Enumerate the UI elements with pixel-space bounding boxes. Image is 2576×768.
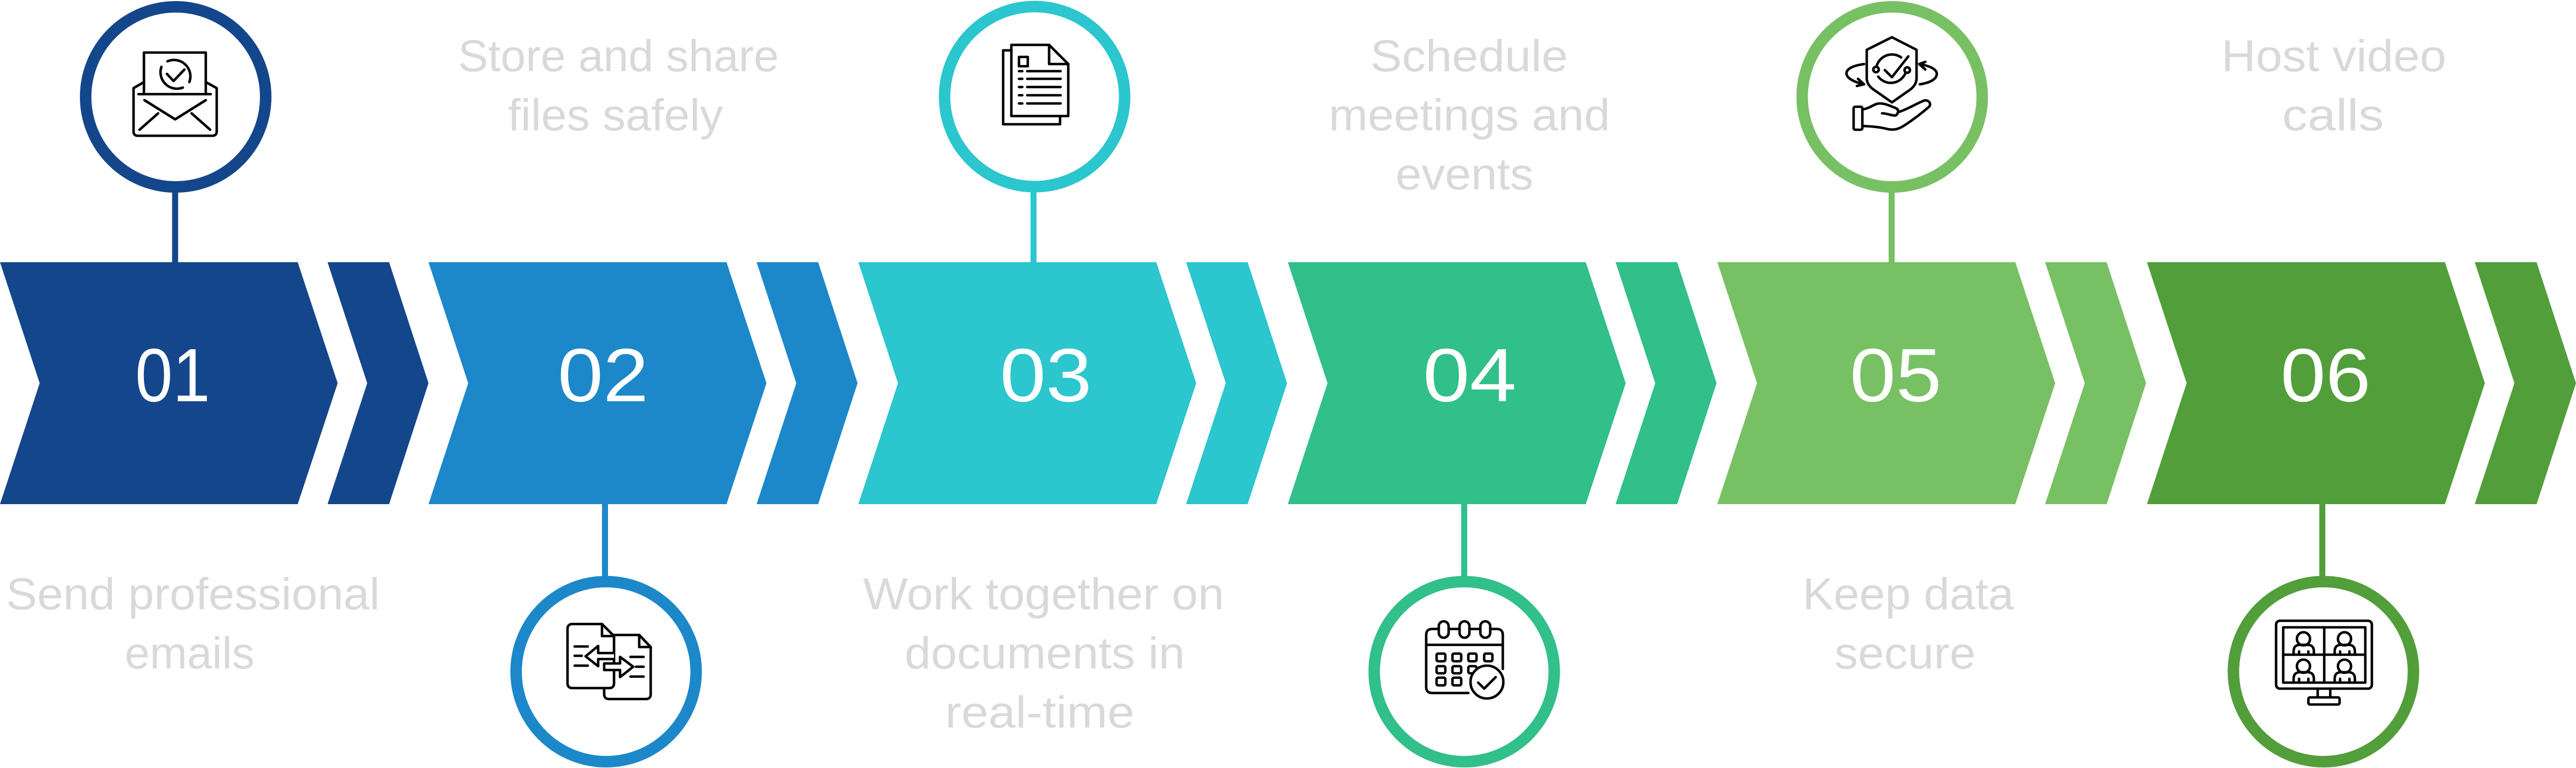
chevron 01 bbox=[0, 262, 429, 504]
connector 5 bbox=[1889, 186, 1895, 262]
number 01: 01 bbox=[135, 333, 210, 418]
ring 1 bbox=[85, 7, 266, 187]
label: send professional emails: emails bbox=[125, 628, 254, 678]
connector 1 bbox=[172, 186, 178, 262]
label: schedule meetings and events: Schedule bbox=[1370, 31, 1568, 81]
connector 3 bbox=[1031, 186, 1037, 262]
label: host video calls: calls bbox=[2282, 90, 2384, 140]
icon: video call monitor bbox=[2276, 621, 2372, 705]
label: work together on documents in real-time: documents in bbox=[905, 628, 1185, 678]
label: work together on documents in real-time: real-time bbox=[945, 688, 1134, 737]
step 4: schedule meetings and events bbox=[1288, 31, 1717, 762]
connector 2 bbox=[602, 504, 608, 581]
label: schedule meetings and events: meetings and bbox=[1329, 90, 1610, 140]
label: store and share files safely: Store and share bbox=[458, 31, 779, 81]
number 02: 02 bbox=[558, 333, 649, 418]
chevron 06 bbox=[2147, 262, 2576, 504]
label: keep data secure: Keep data bbox=[1803, 569, 2014, 619]
label: keep data secure: secure bbox=[1834, 628, 1976, 678]
label: host video calls: Host video bbox=[2221, 31, 2446, 81]
ring 5 bbox=[1802, 7, 1982, 187]
step 2: store and share files safely bbox=[429, 31, 858, 762]
label: store and share files safely bbox=[458, 31, 779, 140]
chevron 04 bbox=[1288, 262, 1717, 504]
label: schedule meetings and events: events bbox=[1396, 149, 1533, 199]
number 03: 03 bbox=[1000, 333, 1092, 418]
icon: shield on open hand bbox=[1846, 37, 1937, 130]
chevron 03 bbox=[858, 262, 1287, 504]
step 6: host video calls bbox=[2147, 31, 2576, 762]
label: keep data secure bbox=[1803, 569, 2014, 678]
label: store and share files safely: files safely bbox=[508, 90, 723, 140]
label: work together on documents in real-time bbox=[863, 569, 1224, 737]
ring 4 bbox=[1374, 581, 1554, 762]
ring 3 bbox=[945, 7, 1125, 187]
number 05: 05 bbox=[1850, 333, 1942, 418]
label: work together on documents in real-time: Work together on bbox=[863, 569, 1224, 619]
chevron 05 bbox=[1717, 262, 2146, 504]
chevron 02 bbox=[429, 262, 858, 504]
ring 2 bbox=[516, 581, 696, 762]
step 5: keep data secure bbox=[1717, 7, 2146, 678]
label: host video calls bbox=[2221, 31, 2446, 140]
icon: calendar with check bbox=[1426, 621, 1503, 698]
icon: documents exchange bbox=[568, 624, 651, 699]
connector 4 bbox=[1461, 504, 1467, 581]
label: schedule meetings and events bbox=[1329, 31, 1610, 199]
label: send professional emails: Send professional bbox=[6, 569, 380, 619]
number 04: 04 bbox=[1423, 333, 1516, 418]
number 06: 06 bbox=[2280, 333, 2371, 418]
step 3: work together on documents bbox=[858, 7, 1287, 737]
icon: stacked documents bbox=[1003, 45, 1068, 124]
label: send professional emails bbox=[6, 569, 380, 678]
step 1: send professional emails bbox=[0, 7, 429, 678]
ring 6 bbox=[2233, 581, 2413, 762]
connector 6 bbox=[2319, 504, 2325, 581]
icon: envelope with checked letter bbox=[134, 53, 217, 136]
